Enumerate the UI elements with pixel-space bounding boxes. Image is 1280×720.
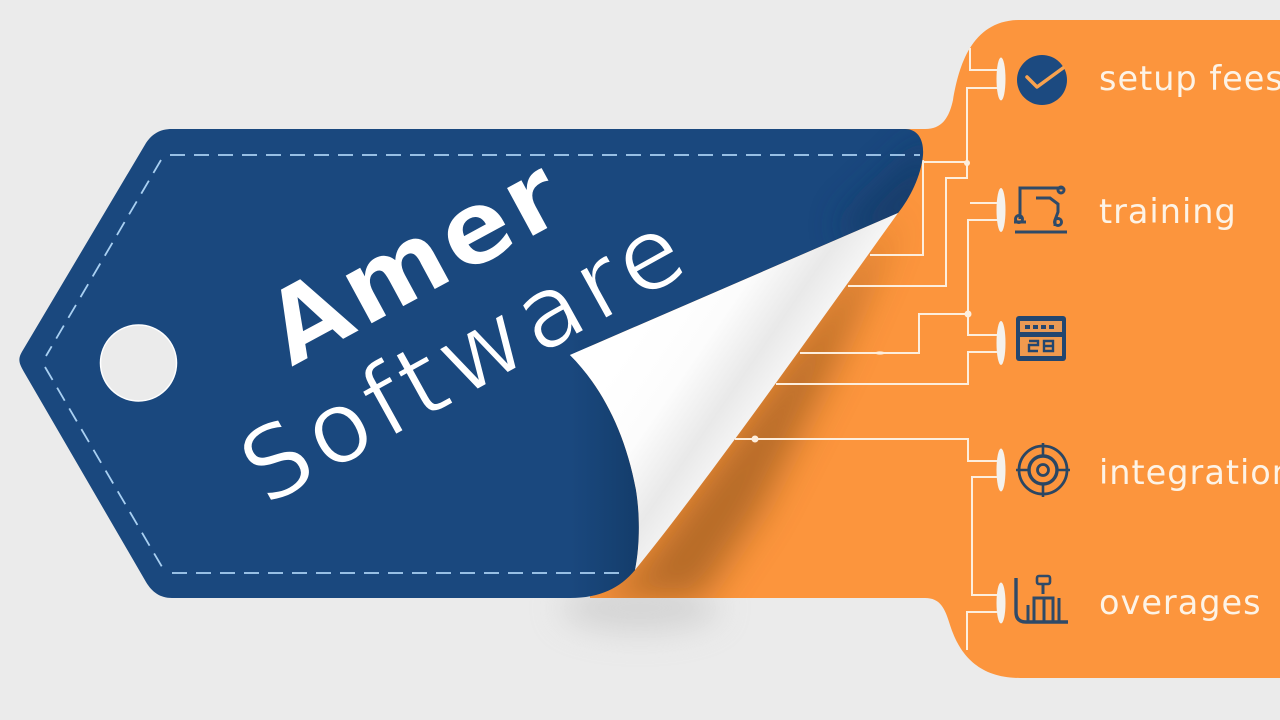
item labels [1099, 59, 1280, 622]
label: overages: overages [1099, 583, 1262, 622]
panel: orange price-tag backing [590, 20, 1280, 678]
label: setup fees: setup fees [1099, 59, 1280, 98]
tag eyelet hole [100, 325, 176, 401]
title: Amer: Amer [246, 132, 585, 390]
icon: overages gauge [1016, 576, 1068, 622]
title: Software: Software [221, 187, 709, 528]
icon: check mark badge [1017, 55, 1067, 105]
panel: blue price tag [19, 129, 935, 600]
drop shadow beneath tag [560, 584, 720, 632]
peeled corner fold [570, 213, 898, 570]
icon: target [1016, 443, 1070, 497]
icon: training machine [1014, 187, 1067, 232]
icon: calendar [1016, 316, 1066, 361]
label: training: training [1099, 192, 1237, 231]
stitching [45, 155, 920, 573]
connector pills [996, 58, 1006, 624]
circuit connector lines [735, 48, 998, 650]
